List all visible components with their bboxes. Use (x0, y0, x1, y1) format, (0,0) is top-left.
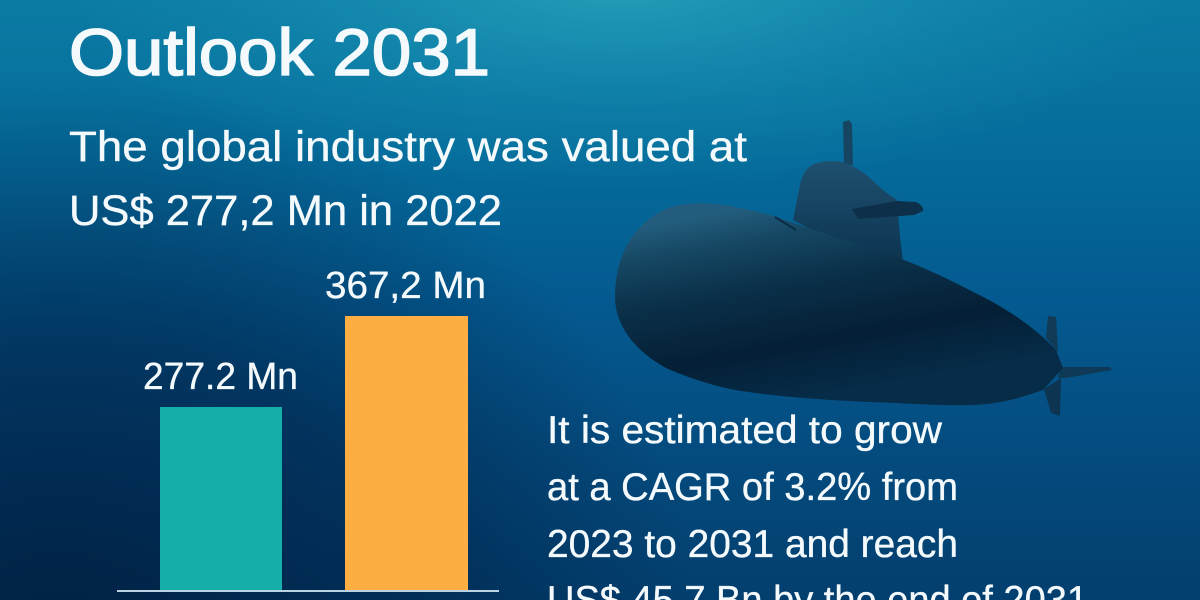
rudder top fin (1046, 316, 1058, 352)
title: Outlook 2031 (69, 15, 490, 89)
axis line (117, 590, 499, 592)
conning tower (793, 161, 903, 262)
bar chart (117, 265, 499, 592)
bar 2031 (345, 316, 468, 590)
periscope mast (843, 120, 853, 165)
bar 2022 (160, 407, 282, 590)
hull (615, 203, 1063, 405)
propeller shaft (1058, 367, 1112, 378)
forecast text (547, 409, 1088, 600)
intro text (69, 123, 747, 235)
forecast text: 2023 to 2031 and reach (547, 523, 958, 566)
intro text: US$ 277,2 Mn in 2022 (69, 187, 502, 235)
forecast text: at a CAGR of 3.2% from (547, 466, 958, 509)
submarine illustration (615, 120, 1112, 416)
forecast text: It is estimated to grow (547, 409, 943, 452)
label 367,2 Mn: 367,2 Mn (325, 265, 486, 307)
diving plane (852, 201, 923, 219)
intro text: The global industry was valued at (69, 123, 747, 171)
label 277.2 Mn: 277.2 Mn (143, 356, 298, 398)
rudder bottom fin (1044, 378, 1061, 416)
hull detail (775, 217, 796, 230)
